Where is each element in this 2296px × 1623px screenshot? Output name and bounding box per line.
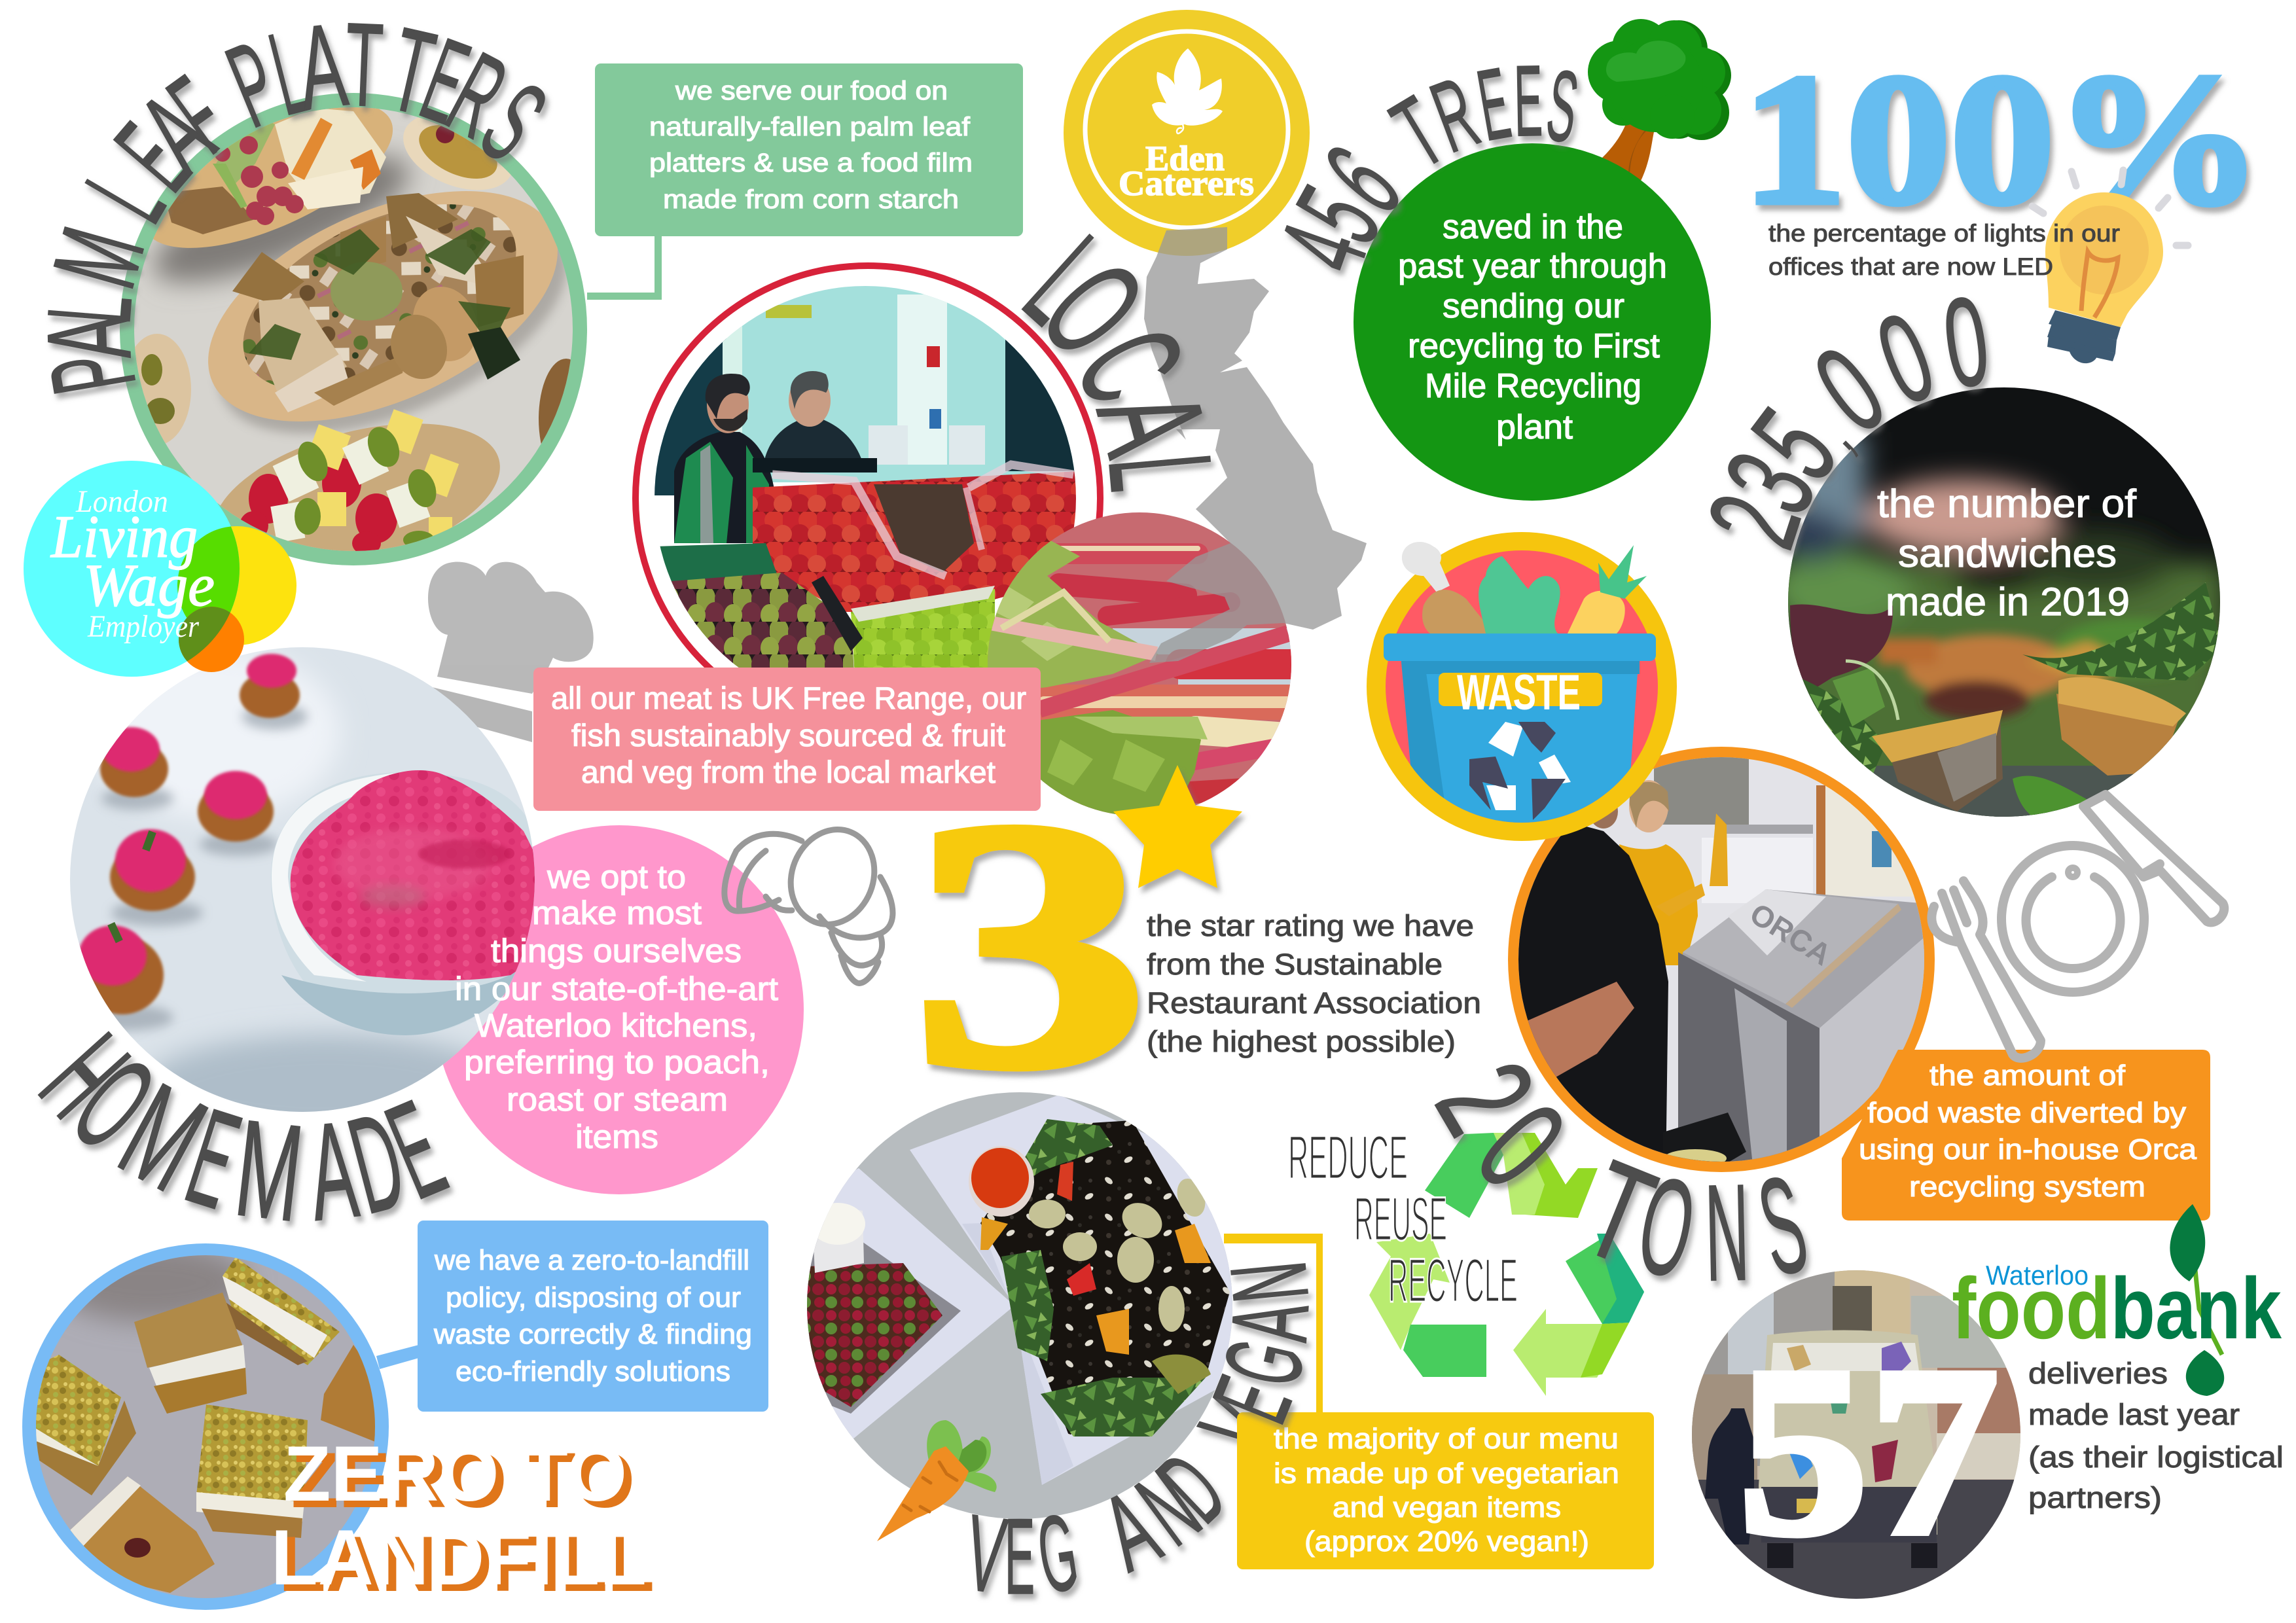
- caption: foodbank deliveries: deliveries: [2028, 1357, 2168, 1390]
- heading: palm leaf platters: F: [147, 52, 249, 177]
- heading: zero to landfill: [271, 1430, 655, 1608]
- heading: zero to landfill: LANDFILL: [279, 1520, 655, 1608]
- heading: 456 trees: 6: [1300, 123, 1425, 236]
- icon: cake slices: [31, 1257, 378, 1593]
- heading: 456 trees: S: [1541, 49, 1585, 164]
- heading: 235,000: 0: [1859, 285, 1952, 432]
- callout: orange Orca text box: food waste diverted by: [1867, 1097, 2186, 1129]
- callout: yellow vegan text box: the majority of our menu: [1274, 1423, 1619, 1455]
- panel: green recycling circle: recycling to First: [1408, 327, 1660, 365]
- heading: veg and vegan: A: [1085, 1467, 1176, 1594]
- panel: rhubarb photo: [982, 510, 1296, 818]
- callout: palm leaf text box: platters & use a food film: [649, 149, 973, 177]
- heading: veg and vegan: E: [1005, 1495, 1035, 1616]
- icon: sauce pot: [969, 1146, 1034, 1217]
- heading: palm leaf platters: T: [379, 2, 445, 140]
- heading: palm leaf platters: T: [342, 0, 386, 132]
- icon: chef hat: [425, 562, 594, 742]
- heading: 20 tons: O: [1627, 1147, 1707, 1308]
- heading: zero to landfill: LANDFILL: [271, 1514, 647, 1601]
- panel: green recycling circle: [1354, 143, 1711, 501]
- callout: connector for vegan box: [1224, 1234, 1323, 1412]
- caption: LED lights: offices that are now LED: [1768, 253, 2053, 280]
- callout: pink homemade text: [455, 859, 778, 1155]
- heading: homemade: H: [13, 1008, 156, 1143]
- heading: palm leaf platters: E: [92, 101, 214, 213]
- callout: yellow vegan text box: [1237, 1412, 1654, 1569]
- heading: palm leaf platters: S: [459, 58, 569, 185]
- callout: palm leaf text box: we serve our food on: [675, 77, 948, 105]
- icon: woman in yellow top: [1619, 780, 1728, 965]
- icon: man in black shirt: [1512, 794, 1668, 1178]
- heading: 456 trees: R: [1418, 56, 1492, 174]
- heading: 456 trees: [1254, 45, 1585, 287]
- panel: zero to landfill cake photo: [22, 1243, 389, 1610]
- heading: 456 trees: 5: [1271, 167, 1405, 262]
- callout: pink homemade text: roast or steam: [507, 1081, 728, 1118]
- panel: van photo: [1692, 1270, 2022, 1604]
- heading: 456 trees: E: [1470, 46, 1518, 162]
- heading: 235,000: 0: [1935, 269, 1997, 415]
- heading: local: L: [997, 207, 1132, 352]
- heading: 20 tons: N: [1704, 1156, 1751, 1310]
- callout: palm leaf text box: [587, 63, 1023, 300]
- panel: waste bin badge: WASTE: [1457, 665, 1581, 721]
- icon: right loaf: [539, 359, 571, 444]
- heading: vegan end letters: G: [1202, 1329, 1327, 1396]
- icon: light bulb: [2032, 170, 2188, 363]
- text: reduce reuse recycle: REDUCE: [1288, 1123, 1408, 1192]
- heading: palm leaf platters: A: [116, 69, 237, 196]
- heading: homemade: M: [228, 1092, 310, 1251]
- heading: palm leaf platters: R: [429, 27, 526, 163]
- heading: 235,000: 3: [1698, 433, 1842, 533]
- logo: London Living Wage Employer: [24, 461, 296, 677]
- icon: croissant: [725, 817, 893, 983]
- heading: homemade: [13, 1008, 463, 1251]
- text: reduce reuse recycle: REUSE: [1354, 1185, 1447, 1254]
- heading: local: [997, 207, 1244, 497]
- logo: Waterloo foodbank: [1952, 1204, 2282, 1396]
- caption: LED lights: the percentage of lights in our: [1768, 220, 2120, 247]
- callout: pink market text box: and veg from the local market: [581, 755, 996, 789]
- panel: sandwiches photo: [1767, 386, 2225, 825]
- heading: palm leaf platters: P: [211, 16, 295, 152]
- callout: pink homemade text: things ourselves: [491, 933, 742, 969]
- heading: palm leaf platters: E: [406, 14, 484, 149]
- icon: crates of apples: [753, 465, 1080, 612]
- heading: 235,000: 0: [1791, 320, 1908, 459]
- callout: orange Orca text box: the amount of: [1929, 1060, 2126, 1092]
- callout: yellow vegan text box: (approx 20% vegan!): [1304, 1525, 1589, 1558]
- heading: palm leaf platters: L: [23, 289, 157, 327]
- panel: green recycling circle: sending our: [1443, 287, 1624, 325]
- heading: zero to landfill: ZERO TO: [291, 1436, 635, 1524]
- caption: foodbank deliveries: partners): [2028, 1481, 2162, 1514]
- heading: veg and vegan: V: [959, 1491, 1013, 1616]
- icon: man in green vest: [674, 374, 776, 543]
- heading: 456 trees: T: [1375, 76, 1462, 190]
- callout: pink homemade text: we opt to: [547, 859, 686, 895]
- heading: 235,000: 2: [1681, 480, 1828, 562]
- heading: vegan end letters: [1191, 1257, 1331, 1437]
- callout: palm leaf text box: made from corn starch: [663, 185, 959, 214]
- logo: Eden Caterers: Caterers: [1119, 164, 1254, 203]
- panel: sandwiches photo: the number of: [1877, 482, 2136, 526]
- callout: blue zero to landfill text box: eco-friendly solutions: [456, 1356, 730, 1387]
- heading: homemade: E: [368, 1072, 463, 1228]
- panel: green recycling circle: plant: [1496, 408, 1573, 446]
- heading: 20 tons: 2: [1407, 1039, 1563, 1157]
- heading: palm leaf platters: L: [259, 5, 318, 141]
- icon: pears and green apples: [660, 543, 995, 668]
- heading: vegan end letters: A: [1208, 1300, 1331, 1345]
- heading: veg and vegan: V: [1177, 1381, 1302, 1474]
- logo: Waterloo foodbank: Waterloo: [1986, 1260, 2089, 1291]
- panel: green recycling circle: Mile Recycling: [1425, 367, 1641, 405]
- caption: LED lights: [1768, 220, 2120, 280]
- heading: palm leaf platters: P: [24, 344, 160, 402]
- heading: 20 tons: 0: [1449, 1077, 1593, 1216]
- heading: homemade: A: [302, 1093, 364, 1250]
- icon: recycling symbol: [1369, 1133, 1644, 1396]
- heading: 20 tons: T: [1565, 1132, 1673, 1294]
- panel: green recycling circle: past year through: [1398, 247, 1667, 285]
- heading: veg and vegan: [959, 1381, 1302, 1616]
- stat: 3 stars: 3: [912, 747, 1149, 1141]
- callout: yellow vegan text box: and vegan items: [1333, 1491, 1561, 1524]
- heading: 235,000: [1681, 269, 1997, 562]
- heading: veg and vegan: N: [1117, 1447, 1220, 1567]
- icon: bread toast left: [1872, 710, 2003, 812]
- callout: pink homemade text: preferring to poach,: [464, 1044, 770, 1080]
- icon: plate fork and knife: [1931, 794, 2224, 1058]
- callout: pink homemade text: items: [575, 1118, 658, 1155]
- icon: foodbank leaf: [2170, 1204, 2205, 1281]
- icon: bowl of beetroot hummus: [271, 770, 543, 1035]
- callout: blue zero to landfill text box: policy, disposing of our: [446, 1282, 741, 1313]
- heading: zero to landfill: ZERO TO: [283, 1430, 627, 1518]
- heading: homemade: E: [171, 1080, 255, 1238]
- heading: palm leaf platters: L: [62, 150, 189, 241]
- heading: 235,000: 5: [1726, 385, 1863, 503]
- panel: waste bin badge: [1367, 532, 1677, 841]
- heading: local: C: [1045, 305, 1215, 426]
- heading: homemade: O: [46, 1030, 181, 1178]
- callout: orange Orca text box: [1842, 1050, 2210, 1221]
- heading: local: O: [1011, 234, 1175, 384]
- callout: pink homemade text: in our state-of-the-art: [455, 971, 778, 1007]
- logo: Eden Caterers: [1064, 10, 1310, 256]
- icon: top platter with cheese and grapes: [153, 107, 393, 248]
- caption: star rating: the star rating we have: [1147, 909, 1474, 942]
- icon: fig leaf: [1152, 48, 1223, 126]
- heading: veg and vegan: D: [1138, 1432, 1247, 1544]
- icon: tree: [1588, 19, 1731, 190]
- icon: Orca machine: [1678, 889, 1928, 1178]
- caption: foodbank deliveries: made last year: [2028, 1398, 2240, 1431]
- panel: green recycling circle: saved in the: [1443, 208, 1623, 246]
- callout: orange Orca text box: using our in-house Orca: [1859, 1133, 2197, 1166]
- icon: foodbank seed: [2186, 1350, 2224, 1396]
- caption: star rating: from the Sustainable: [1147, 948, 1443, 981]
- callout: orange Orca text box: recycling system: [1909, 1171, 2145, 1203]
- stat: 100%: 100%: [1742, 35, 2263, 243]
- callout: pink homemade text: Waterloo kitchens,: [475, 1007, 757, 1044]
- heading: 456 trees: E: [1513, 45, 1543, 158]
- icon: smiling man: [764, 371, 861, 458]
- heading: palm leaf platters: M: [27, 215, 170, 300]
- icon: drumstick leaf and pineapple: [1402, 542, 1647, 633]
- panel: veg and vegan photo: [785, 1090, 1244, 1522]
- icon: star: [1113, 765, 1242, 888]
- panel: sandwiches photo: sandwiches: [1898, 531, 2117, 575]
- icon: Orca machine: ORCA: [1744, 896, 1837, 972]
- caption: star rating: Restaurant Association: [1147, 986, 1481, 1020]
- heading: palm leaf platters: [22, 0, 569, 402]
- callout: pink homemade text: make most: [532, 895, 702, 931]
- caption: foodbank deliveries: [2028, 1357, 2284, 1514]
- logo: London Living Wage Employer: Living: [50, 503, 198, 570]
- heading: 20 tons: S: [1747, 1147, 1820, 1306]
- text: reduce reuse recycle: [1288, 1123, 1518, 1315]
- caption: star rating: [1147, 909, 1481, 1058]
- heading: 20 tons: [1407, 1039, 1820, 1310]
- callout: pink market text box: [533, 668, 1041, 811]
- logo: Eden Caterers: Eden: [1145, 139, 1225, 178]
- icon: recycle arrows: [1469, 722, 1571, 820]
- callout: blue zero to landfill text box: waste correctly & finding: [433, 1319, 752, 1350]
- icon: bowl top right: [403, 117, 511, 190]
- panel: palm leaf platters photo: [120, 93, 587, 565]
- heading: 235,000: ,: [1797, 395, 1867, 465]
- callout: blue zero to landfill text box: we have a zero-to-landfill: [434, 1245, 749, 1276]
- logo: London Living Wage Employer: Employer: [87, 609, 199, 644]
- icon: large plate with black rice: [910, 1095, 1244, 1485]
- heading: vegan end letters: N: [1208, 1257, 1331, 1307]
- callout: pink market text box: fish sustainably sourced & fruit: [571, 718, 1005, 753]
- icon: beetroot canapes: [79, 654, 308, 1031]
- heading: local: L: [1077, 448, 1244, 497]
- heading: local: A: [1066, 375, 1238, 469]
- heading: vegan end letters: E: [1191, 1363, 1315, 1437]
- caption: star rating: (the highest possible): [1147, 1025, 1456, 1058]
- heading: palm leaf platters: A: [22, 313, 156, 361]
- text: RECYCLE: [1388, 1246, 1518, 1315]
- panel: homemade beetroot photo: [65, 645, 804, 1194]
- icon: UK map: [1144, 227, 1367, 663]
- heading: homemade: M: [98, 1055, 228, 1221]
- heading: 456 trees: 4: [1254, 209, 1392, 287]
- icon: bread toast right: [2056, 677, 2186, 776]
- icon: left olive bowl: [135, 334, 191, 444]
- logo: London Living Wage Employer: London: [75, 484, 168, 519]
- panel: sandwiches photo: made in 2019: [1886, 580, 2130, 624]
- icon: bottom fruit skewer platter: [221, 409, 500, 551]
- heading: homemade: D: [335, 1082, 418, 1243]
- panel: market photo with red ring: [632, 262, 1103, 668]
- icon: purple leaf: [1790, 605, 1893, 694]
- panel: Orca recycling photo: [1508, 747, 1937, 1178]
- callout: pink market text box: all our meat is UK Free Range, our: [551, 681, 1026, 715]
- icon: left plate with salad: [785, 1168, 1014, 1442]
- callout: palm leaf text box: naturally-fallen palm leaf: [649, 113, 971, 141]
- icon: carrot: [877, 1420, 997, 1541]
- callout: blue zero to landfill text box: [376, 1221, 768, 1412]
- panel: van photo: 57: [1738, 1317, 2000, 1586]
- callout: yellow vegan text box: is made up of vegetarian: [1274, 1457, 1619, 1489]
- icon: delivery person: [1705, 1408, 1754, 1544]
- icon: delivery van: [1759, 1330, 1937, 1568]
- heading: palm leaf platters: A: [291, 0, 353, 135]
- logo: London Living Wage Employer: Wage: [83, 552, 215, 618]
- caption: foodbank deliveries: (as their logistical: [2028, 1440, 2284, 1474]
- icon: central sandwich platter: [208, 191, 568, 438]
- heading: veg and vegan: G: [1030, 1492, 1085, 1616]
